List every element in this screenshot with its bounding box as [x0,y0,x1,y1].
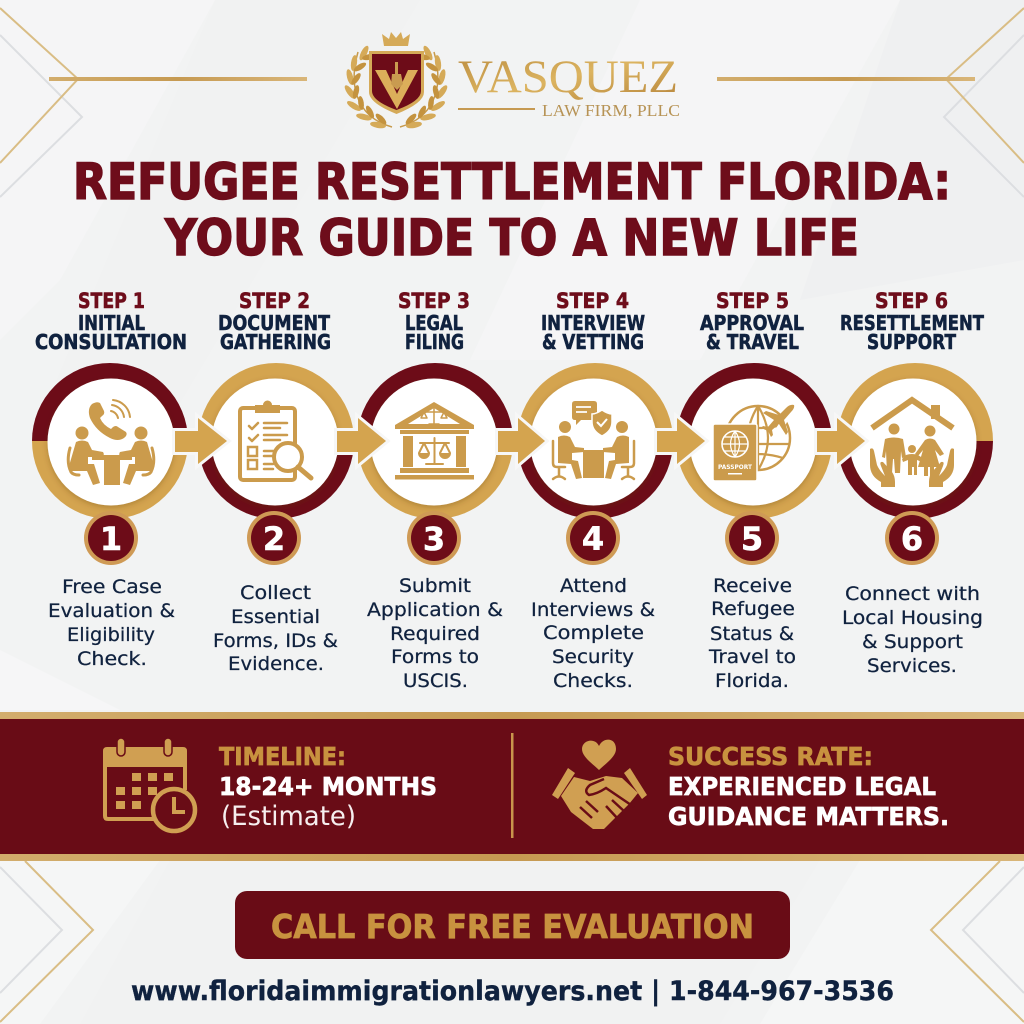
call to action button [235,891,790,959]
step 6 heading: STEP 6 [875,289,948,314]
number badge 6: 6 [901,520,923,558]
step 1 heading: INITIAL [78,311,145,335]
step 5 heading: STEP 5 [716,289,789,314]
step 3 description: Required [390,623,480,645]
step 2 heading [218,289,331,354]
step 6 description: Services. [867,655,957,677]
number badge 5 [725,511,779,565]
step 2 heading: STEP 2 [239,289,310,314]
step 3 description: Forms to [391,646,479,668]
step 4 description: Checks. [553,670,633,692]
icon: passport with globe and plane: PASSPORT [718,463,752,471]
arrow 4 to 5 [657,418,705,464]
timeline text: (Estimate) [221,801,356,832]
logo subtitle: LAW FIRM, PLLC [542,101,680,120]
number badge 2: 2 [263,520,285,558]
bottom corner chevron lines [0,861,1024,1022]
timeline text [219,742,437,832]
step 2 description: Evidence. [228,653,324,675]
step 4 description [531,575,655,692]
step 5 heading: & TRAVEL [706,330,799,354]
arrow 1 to 2 [175,418,227,464]
step 4 heading: STEP 4 [556,289,629,314]
step 3 description: Submit [399,575,471,597]
step 3 heading: FILING [405,330,464,354]
number badge 3 [407,511,461,565]
icon: calendar with clock [103,738,195,831]
number badge 6 [885,511,939,565]
step 6 description: & Support [862,631,963,653]
header rule right [717,77,975,81]
title: YOUR GUIDE TO A NEW LIFE [164,209,859,267]
step 3 heading: LEGAL [405,311,463,335]
step 2 description [213,582,338,675]
step 4 heading: & VETTING [542,330,644,354]
top corner chevron lines [0,8,1024,197]
icon: clipboard with magnifier [240,400,311,480]
step 2 description: Forms, IDs & [213,630,338,652]
arrow 5 to 6 [817,418,865,464]
icon: handshake with heart [552,740,647,829]
title [73,153,951,267]
step 1 description: Check. [77,648,147,670]
step 5 description: Florida. [715,670,789,692]
step 6 heading: RESETTLEMENT [840,311,984,335]
timeline text: TIMELINE: [219,742,346,771]
icon: passport with globe and plane [713,404,795,481]
step 1 description [48,576,175,670]
step 1 description: Evaluation & [48,600,175,622]
icon: courthouse with scales [395,402,474,480]
step 2 heading: DOCUMENT [218,311,330,335]
maroon info band [0,712,1024,861]
call to action button: CALL FOR FREE EVALUATION [271,907,754,946]
step 5 description [708,575,796,692]
icon: family under roof with hands [870,400,954,487]
step 1 heading: CONSULTATION [35,330,187,354]
step 4 description: Attend [560,575,627,597]
step 1 heading: STEP 1 [78,289,145,314]
number badge 4 [566,511,620,565]
step 1 heading [35,289,187,354]
step 6 heading: SUPPORT [867,330,956,354]
logo emblem [343,32,449,129]
number badge 2 [247,511,301,565]
step 5 description: Travel to [708,646,796,668]
icon: consultation with phone [68,400,154,485]
step 1 ring [32,363,188,519]
step 4 description: Security [552,646,634,668]
number badge 3: 3 [423,520,445,558]
step 1 description: Eligibility [67,624,155,646]
number badge 1: 1 [100,520,122,558]
step 6 heading [840,289,984,354]
logo wordmark: VASQUEZ [458,51,678,103]
icon: interview with shield [553,401,634,479]
step 3 heading: STEP 3 [398,289,470,314]
step 2 ring [198,363,354,519]
step 5 description: Refugee [711,598,795,620]
step 6 description [842,583,983,677]
step 3 description [367,575,503,692]
step 6 ring [837,363,993,519]
step 5 description: Receive [713,575,792,597]
step 3 description: Application & [367,599,503,621]
step 2 description: Collect [240,582,311,604]
timeline text: 18-24+ MONTHS [219,772,437,801]
step 4 heading [541,289,645,354]
step 4 description: Interviews & [531,599,655,621]
success rate text: EXPERIENCED LEGAL [668,772,936,801]
step 6 description: Local Housing [842,607,983,629]
step 4 heading: INTERVIEW [541,311,645,335]
step 5 heading [700,289,804,354]
step 5 ring [676,363,832,519]
logo: Vasquez Law Firm [343,32,680,129]
number badge 1 [84,511,138,565]
step 4 ring [517,363,673,519]
step 3 ring [357,363,513,519]
logo rule [458,108,535,110]
header rule left [49,77,307,81]
step 5 description: Status & [710,623,794,645]
step 1 description: Free Case [62,576,162,598]
step 2 heading: GATHERING [220,330,331,354]
step 2 description: Essential [231,606,320,628]
step 3 heading [398,289,470,354]
arrow 2 to 3 [337,418,386,464]
number badge 4: 4 [582,520,604,558]
success rate text [668,742,949,831]
step 6 description: Connect with [845,583,980,605]
arrow 3 to 4 [498,418,545,464]
number badge 5: 5 [741,520,763,558]
step 5 heading: APPROVAL [700,311,804,335]
website and phone: www.floridaimmigrationlawyers.net | 1-844-967-3536 [131,976,894,1007]
step 3 description: USCIS. [403,670,468,692]
success rate text: GUIDANCE MATTERS. [668,802,949,831]
step 4 description: Complete [543,622,644,644]
success rate text: SUCCESS RATE: [668,742,873,771]
